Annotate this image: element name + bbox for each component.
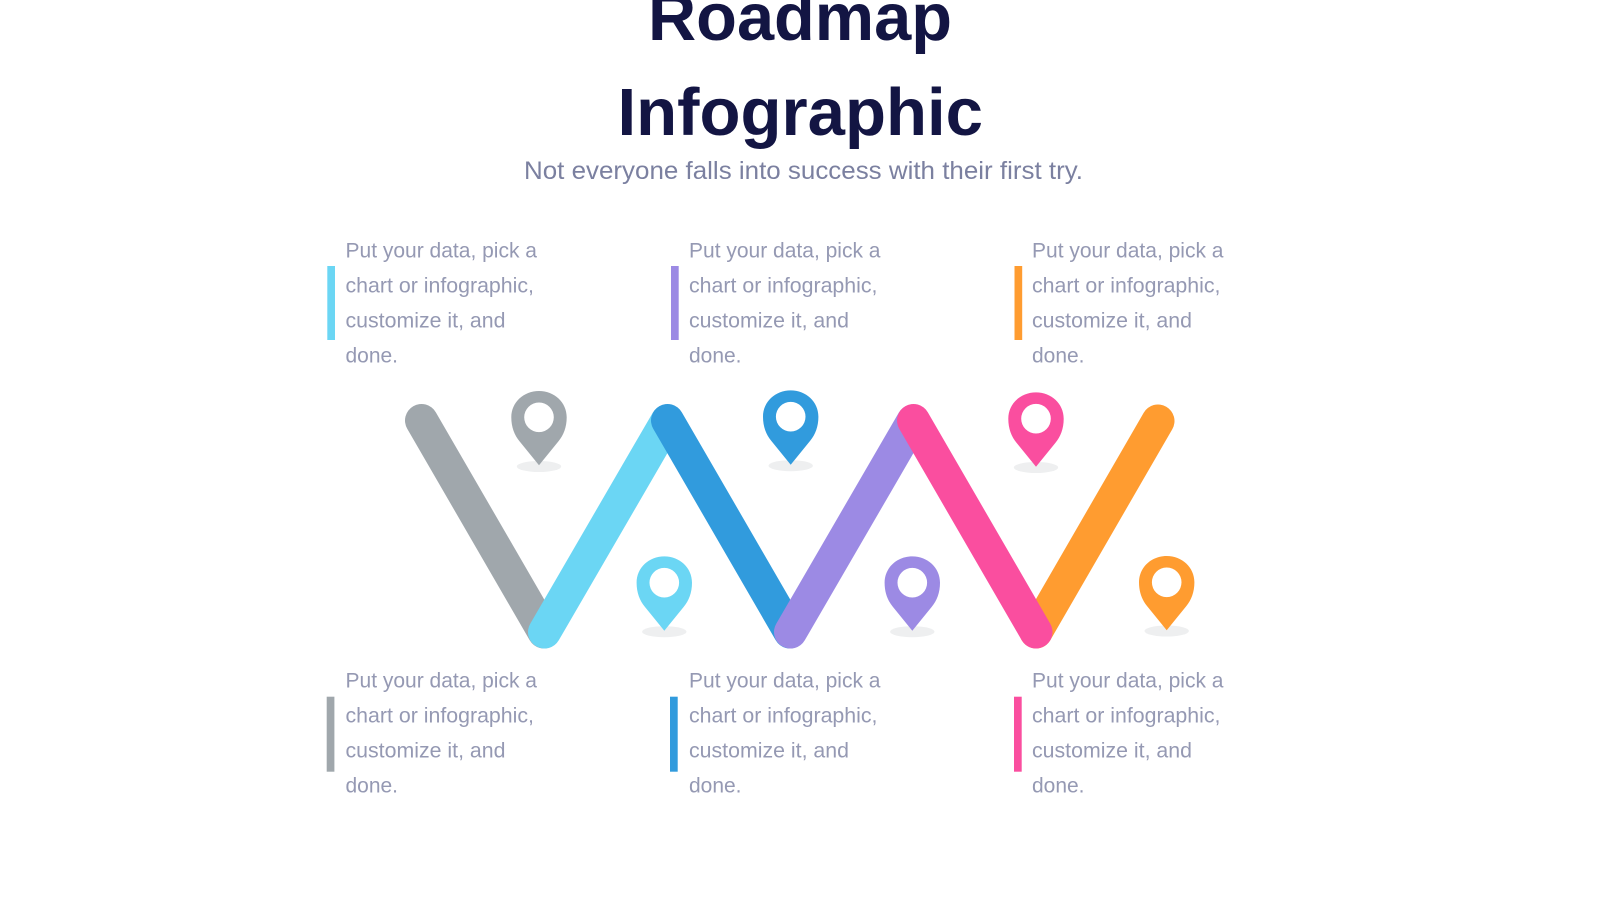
description: customize it, and bbox=[346, 740, 506, 762]
title bbox=[618, 0, 983, 150]
text block: bottom right bbox=[1014, 670, 1224, 798]
road segment: gray bbox=[422, 420, 544, 632]
description: Put your data, pick a bbox=[689, 240, 881, 262]
text block: top middle bbox=[671, 240, 881, 368]
description: chart or infographic, bbox=[689, 704, 878, 728]
accent bar: blue bbox=[670, 697, 678, 772]
description bbox=[1032, 240, 1224, 368]
description: done. bbox=[346, 774, 398, 798]
description: done. bbox=[689, 344, 742, 368]
description bbox=[346, 240, 537, 368]
accent bar: pink bbox=[1014, 697, 1022, 772]
description: chart or infographic, bbox=[689, 274, 878, 298]
road segment: orange bbox=[1036, 421, 1158, 632]
map pin: cyan bbox=[637, 556, 692, 637]
text block: bottom left bbox=[327, 670, 537, 798]
description: done. bbox=[1032, 344, 1084, 368]
zigzag road bbox=[422, 420, 1158, 632]
description: chart or infographic, bbox=[346, 274, 534, 298]
description bbox=[1032, 670, 1224, 798]
description: Put your data, pick a bbox=[1032, 670, 1224, 692]
description: customize it, and bbox=[1032, 310, 1192, 332]
description: done. bbox=[1032, 774, 1084, 798]
description bbox=[689, 240, 881, 368]
text block: top left bbox=[327, 240, 537, 368]
description: Put your data, pick a bbox=[346, 240, 537, 262]
description: done. bbox=[689, 774, 742, 798]
description: Put your data, pick a bbox=[1032, 240, 1224, 262]
text block: bottom middle bbox=[670, 670, 881, 798]
description: Put your data, pick a bbox=[346, 670, 537, 692]
description: customize it, and bbox=[346, 310, 506, 332]
map pin: orange bbox=[1139, 556, 1194, 636]
accent bar: gray bbox=[327, 697, 334, 772]
description: Put your data, pick a bbox=[689, 670, 881, 692]
map pin: blue bbox=[763, 390, 818, 471]
description: customize it, and bbox=[689, 740, 849, 762]
accent bar: orange bbox=[1014, 266, 1022, 340]
text block: top right bbox=[1014, 240, 1224, 368]
description: chart or infographic, bbox=[1032, 274, 1220, 298]
map pin: pink bbox=[1008, 392, 1064, 473]
subtitle: Not everyone falls into success with their first try. bbox=[524, 157, 1083, 185]
description bbox=[689, 670, 881, 798]
road segment: purple bbox=[790, 421, 913, 632]
road segment: blue bbox=[668, 420, 790, 632]
accent bar: purple bbox=[671, 266, 679, 340]
map pin: gray bbox=[511, 391, 567, 472]
road segment: pink bbox=[914, 420, 1036, 632]
title: Infographic bbox=[618, 75, 983, 150]
map pin: purple bbox=[885, 556, 940, 637]
description bbox=[346, 670, 537, 798]
description: chart or infographic, bbox=[1032, 704, 1220, 728]
description: done. bbox=[346, 344, 398, 368]
road segment: cyan bbox=[544, 421, 667, 632]
description: chart or infographic, bbox=[346, 704, 534, 728]
accent bar: cyan bbox=[327, 266, 335, 340]
description: customize it, and bbox=[1032, 740, 1192, 762]
description: customize it, and bbox=[689, 310, 849, 332]
